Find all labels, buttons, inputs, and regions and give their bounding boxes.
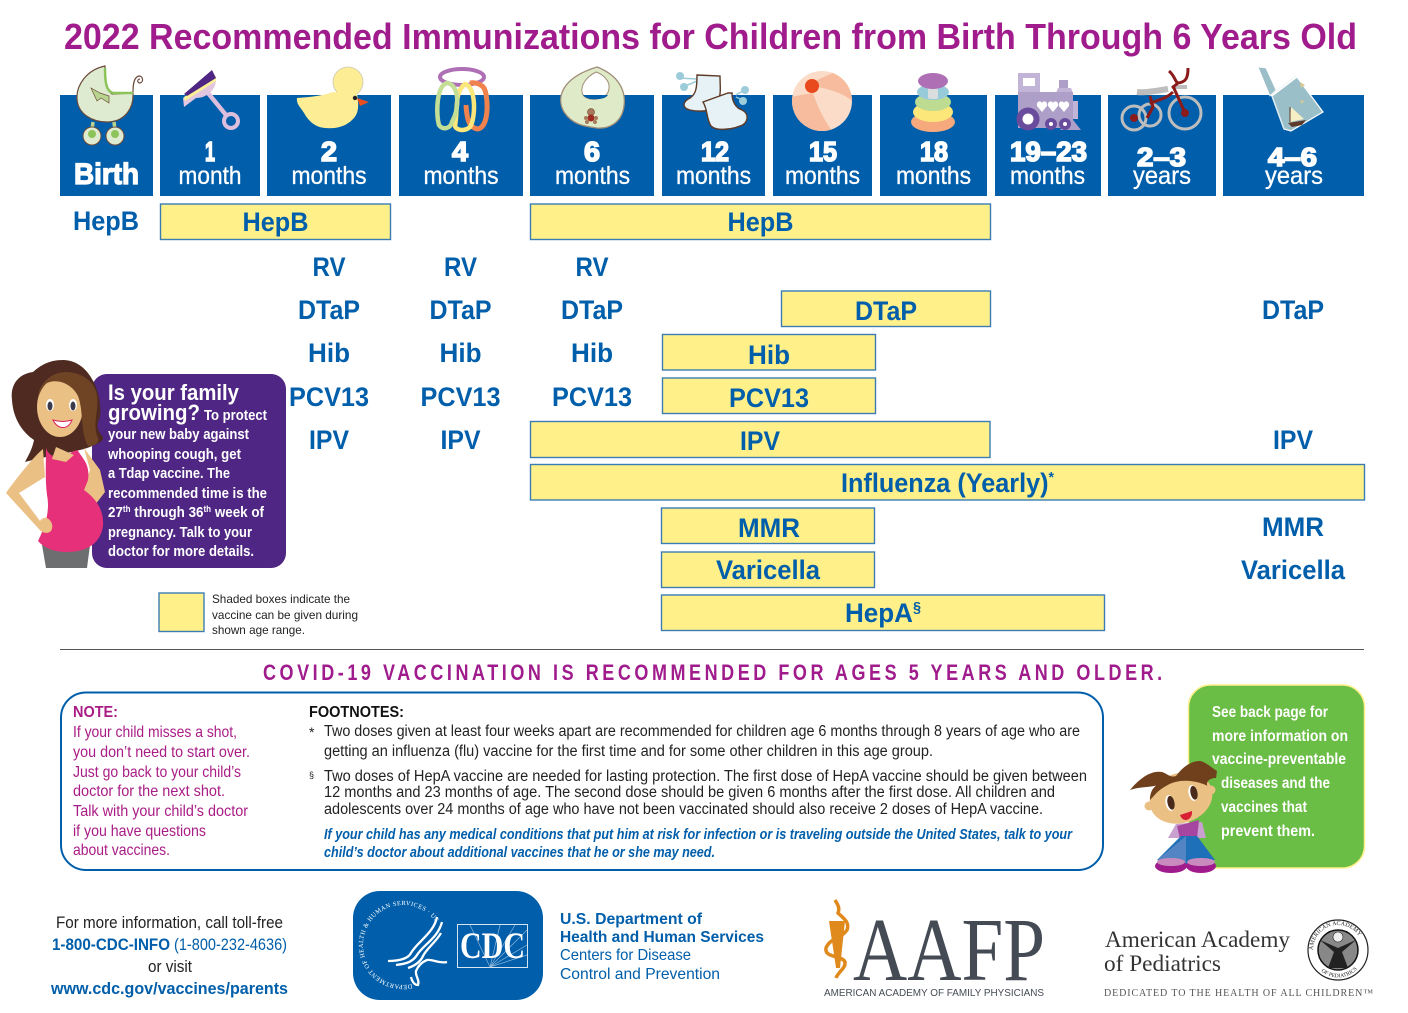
- icon: ring stacker: [911, 73, 955, 132]
- footnotes: child’s doctor about additional vaccines that he or she may need.: [324, 845, 715, 861]
- header: 15 months: [773, 95, 872, 196]
- icon: beach ball: [792, 71, 852, 131]
- row: RV: RV: [444, 252, 477, 282]
- row: Influenza: *: [1049, 469, 1054, 486]
- footnotes: [309, 704, 1087, 861]
- note: [73, 704, 250, 859]
- row: HepA: §: [913, 599, 921, 616]
- row: MMR: [662, 508, 1324, 544]
- header: 15 months: months: [785, 162, 860, 190]
- AAP seal: AMERICAN ACADEMY: [1309, 921, 1362, 950]
- header: 4-6 years: years: [1265, 162, 1323, 190]
- callout text: th: [123, 504, 131, 514]
- logo: American Academy of Pediatrics: DEDICATED TO THE HEALTH OF ALL CHILDREN™: [1104, 988, 1373, 999]
- back page text: vaccine-preventable: [1212, 751, 1346, 768]
- row: IPV: [309, 422, 1313, 458]
- legend: vaccine can be given during: [212, 608, 358, 622]
- header: 6 months: 6: [584, 136, 600, 167]
- legend: [159, 592, 358, 637]
- header: 2-3 years: years: [1133, 162, 1191, 190]
- logo: HHS and CDC: [353, 891, 543, 1000]
- back page text: diseases and the: [1221, 775, 1330, 792]
- icon: baby booties: [676, 72, 749, 129]
- department text: [560, 911, 764, 983]
- back page text: more information on: [1212, 728, 1348, 745]
- logo: AAFP: AAFP: [853, 901, 1045, 1000]
- header: 4 months: months: [424, 162, 498, 190]
- footnotes: If your child has any medical conditions that put him at risk for infection or is traveling outside the United States, talk to your: [324, 827, 1073, 843]
- note: you don’t need to start over.: [73, 744, 250, 761]
- header: 4-6 years: 4–6: [1268, 142, 1317, 172]
- row: DTaP: [298, 291, 1324, 326]
- row: Hib: [308, 334, 876, 370]
- contact information: (1-800-232-4636): [174, 936, 287, 954]
- header: 19-23 months: months: [1010, 162, 1085, 190]
- back page text: [1212, 704, 1348, 840]
- row: HepB: HepB: [728, 207, 794, 237]
- callout text: th: [204, 504, 211, 514]
- note: If your child misses a shot,: [73, 724, 237, 741]
- row: HepB: [73, 204, 990, 240]
- header: 2-3 years: [1108, 95, 1216, 196]
- legend: Shaded boxes indicate the: [212, 592, 350, 606]
- logo: American Academy of Pediatrics: of Pediatrics: [1104, 951, 1221, 977]
- header: 15 months: 15: [809, 136, 837, 167]
- icon: toy train: [1018, 73, 1081, 130]
- callout text: through 36: [131, 504, 204, 521]
- row: DTaP: DTaP: [561, 295, 623, 325]
- row: Influenza: Influenza (Yearly): [841, 468, 1063, 498]
- header: birth: Birth: [74, 158, 139, 191]
- row: IPV: IPV: [740, 426, 780, 456]
- illustration: pregnant mother: [6, 360, 105, 568]
- row: IPV: IPV: [1273, 425, 1313, 455]
- header: 2-3 years: 2–3: [1137, 142, 1186, 172]
- header: 2 months: [267, 95, 391, 196]
- footnotes: FOOTNOTES:: [309, 704, 404, 721]
- callout text: doctor for more details.: [108, 543, 254, 560]
- callout text: To protect: [204, 407, 267, 424]
- header: 12 months: 12: [701, 136, 729, 167]
- header: 4 months: [399, 95, 523, 196]
- icon: rattle: [183, 70, 238, 128]
- row: PCV13: PCV13: [420, 382, 500, 412]
- AAP seal: [1307, 919, 1369, 981]
- note: NOTE:: [73, 704, 118, 721]
- header: 2 months: 2: [321, 136, 337, 167]
- callout text: growing?: [108, 400, 200, 425]
- callout text: [107, 380, 267, 560]
- note: Just go back to your child’s: [73, 764, 241, 781]
- footnotes: adolescents over 24 months of age who have not been vaccinated should also receive 2 doses of HepA vaccine.: [324, 801, 1043, 818]
- row: Influenza: [530, 464, 1364, 500]
- callout text: recommended time is the: [108, 485, 267, 502]
- row: HepB: HepB: [242, 207, 308, 237]
- row: Hib: Hib: [571, 338, 613, 368]
- row: DTaP: DTaP: [298, 295, 360, 325]
- panel: pregnancy callout: [6, 360, 286, 568]
- row: DTaP: DTaP: [430, 295, 492, 325]
- row: MMR: MMR: [738, 513, 800, 543]
- note: Talk with your child’s doctor: [73, 803, 249, 820]
- logo: AAFP: AMERICAN ACADEMY OF FAMILY PHYSICIANS: [824, 987, 1044, 999]
- header: 12 months: [662, 95, 765, 196]
- note: doctor for the next shot.: [73, 783, 225, 800]
- callout text: Is your family: [108, 380, 240, 405]
- COVID-19 notice: COVID-19 VACCINATION IS RECOMMENDED FOR AGES 5 YEARS AND OLDER.: [263, 661, 1162, 686]
- row: DTaP: DTaP: [855, 296, 917, 326]
- row: RV: RV: [576, 252, 608, 282]
- row: MMR: MMR: [1262, 512, 1324, 542]
- icon: stroller: [77, 66, 143, 145]
- AAP seal: OF PEDIATRICS: [1322, 967, 1357, 978]
- header: 18 months: [880, 95, 987, 196]
- logo: American Academy of Pediatrics: American Academy: [1105, 927, 1290, 953]
- header: 19-23 months: 19–23: [1010, 136, 1087, 167]
- logo: American Academy of Pediatrics: [1104, 919, 1373, 999]
- row: PCV13: PCV13: [552, 382, 632, 412]
- department text: Health and Human Services: [560, 929, 764, 946]
- footnotes: §: [309, 770, 314, 780]
- contact information: 1-800-CDC-INFO: [52, 936, 170, 954]
- footnotes: Two doses given at least four weeks apart are recommended for children age 6 months through 8 years of age who are: [324, 723, 1080, 740]
- age header row: [60, 95, 1364, 196]
- contact information: or visit: [148, 958, 192, 976]
- CDC mark: CDC: [460, 926, 525, 967]
- row: Varicella: Varicella: [716, 555, 821, 585]
- row: RV: [312, 252, 608, 282]
- callout text: pregnancy. Talk to your: [108, 524, 252, 541]
- row: HepA: HepA: [845, 598, 916, 628]
- icon: bib: [561, 67, 624, 128]
- contact information: [50, 914, 288, 998]
- back page text: prevent them.: [1221, 823, 1315, 840]
- HHS seal: [358, 900, 448, 990]
- contact information: For more information, call toll-free: [56, 914, 283, 932]
- header: 1 month: month: [178, 162, 242, 190]
- row: PCV13: PCV13: [729, 383, 809, 413]
- row: PCV13: [289, 378, 876, 414]
- icon: story book: [1258, 67, 1323, 131]
- row: IPV: IPV: [309, 425, 349, 455]
- header: 19-23 months: [995, 95, 1101, 196]
- header: birth: [60, 95, 153, 196]
- back page text: See back page for: [1212, 704, 1328, 721]
- row: HepB: HepB: [73, 206, 139, 236]
- header: 2 months: months: [292, 162, 366, 190]
- header: 1 month: [160, 95, 260, 196]
- department text: Control and Prevention: [560, 966, 720, 983]
- callout text: your new baby against: [108, 426, 249, 443]
- row: IPV: IPV: [440, 425, 480, 455]
- back page text: vaccines that: [1221, 799, 1308, 816]
- row: Varicella: Varicella: [1241, 555, 1346, 585]
- note: about vaccines.: [73, 842, 170, 859]
- header: 1 month: 1: [205, 136, 215, 167]
- vaccine rows: [73, 204, 1364, 630]
- header: 6 months: months: [555, 162, 630, 190]
- footnotes: 12 months and 23 months of age. The second dose should be given 6 months after the first dose. All children and: [324, 784, 1055, 801]
- panel: notes and footnotes: [61, 692, 1103, 870]
- row: PCV13: PCV13: [289, 382, 369, 412]
- HHS seal: DEPARTMENT OF HEALTH & HUMAN SERVICES · USA: [358, 900, 439, 990]
- callout text: week of: [211, 504, 265, 521]
- footnotes: *: [309, 724, 315, 740]
- footnotes: getting an influenza (flu) vaccine for the first time and for some other children in this age group.: [324, 743, 933, 760]
- row: DTaP: DTaP: [1262, 295, 1324, 325]
- callout text: whooping cough, get: [107, 446, 241, 463]
- department text: U.S. Department of: [560, 911, 703, 928]
- row: Hib: Hib: [308, 338, 350, 368]
- row: Hib: Hib: [748, 340, 790, 370]
- row: RV: RV: [312, 252, 346, 282]
- callout text: a Tdap vaccine. The: [108, 465, 230, 482]
- header: 4 months: 4: [452, 136, 468, 167]
- header: 6 months: [530, 95, 654, 196]
- legend: shown age range.: [212, 623, 305, 637]
- row: Hib: Hib: [440, 338, 482, 368]
- row: HepA: [662, 595, 1104, 630]
- note: if you have questions: [73, 823, 206, 840]
- illustration: little girl: [1130, 761, 1219, 873]
- title: 2022 Recommended Immunizations for Children from Birth Through 6 Years Old: [64, 16, 1357, 57]
- header: 18 months: months: [896, 162, 971, 190]
- header: 4-6 years: [1223, 95, 1364, 196]
- AAFP staff emblem: [826, 900, 848, 978]
- header: 12 months: months: [676, 162, 751, 190]
- icon: rubber duck: [297, 67, 369, 128]
- footnotes: Two doses of HepA vaccine are needed for lasting protection. The first dose of HepA vaccine should be given between: [324, 768, 1087, 785]
- row: Varicella: [662, 552, 1346, 588]
- callout text: 27: [108, 504, 125, 521]
- icon: stacking rings: [437, 69, 487, 130]
- header: 18 months: 18: [920, 136, 948, 167]
- contact information: www.cdc.gov/vaccines/parents: [50, 980, 288, 998]
- icon: tricycle: [1122, 68, 1201, 130]
- department text: Centers for Disease: [560, 947, 691, 964]
- panel: see back page: [1130, 685, 1364, 873]
